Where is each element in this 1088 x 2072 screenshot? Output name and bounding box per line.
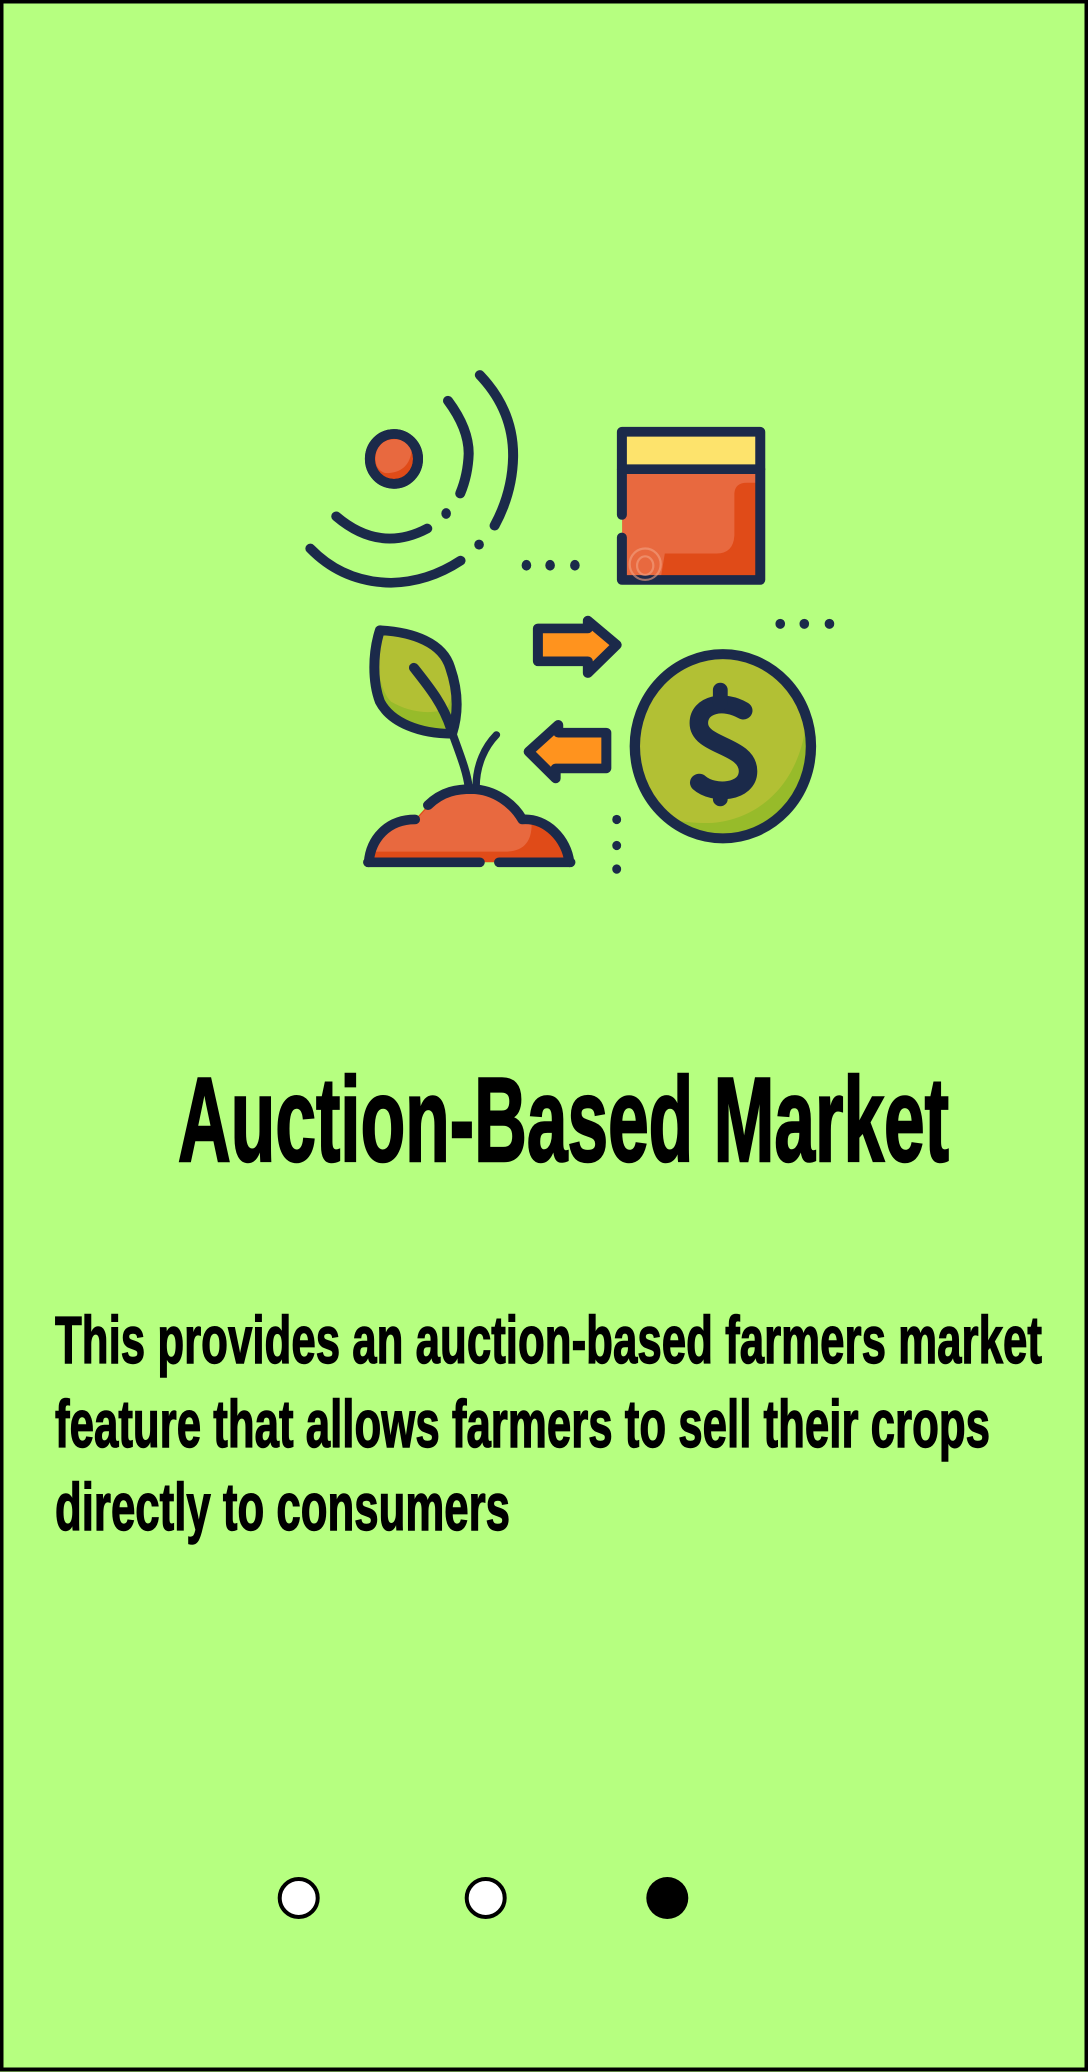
- arrow: right to coin: [538, 621, 617, 673]
- icon: soil mound: [368, 789, 570, 862]
- icon: auction market illustration: [310, 375, 834, 874]
- icon: crate box: [622, 432, 760, 580]
- icon: dots near coin: [775, 619, 834, 629]
- body text: directly to consumers: [55, 1470, 510, 1545]
- icon: seedling leaf and stems: [374, 630, 496, 787]
- icon: dots near box: [522, 560, 580, 571]
- icon: dollar coin: [635, 654, 811, 838]
- arrow: left to plant: [529, 725, 606, 778]
- icon: signal source with waves: [310, 375, 513, 583]
- icon: dots near soil: [612, 815, 621, 874]
- icon: watermark spiral: [630, 548, 661, 580]
- body text: [55, 1303, 1042, 1545]
- pagination dots: [280, 1877, 688, 1919]
